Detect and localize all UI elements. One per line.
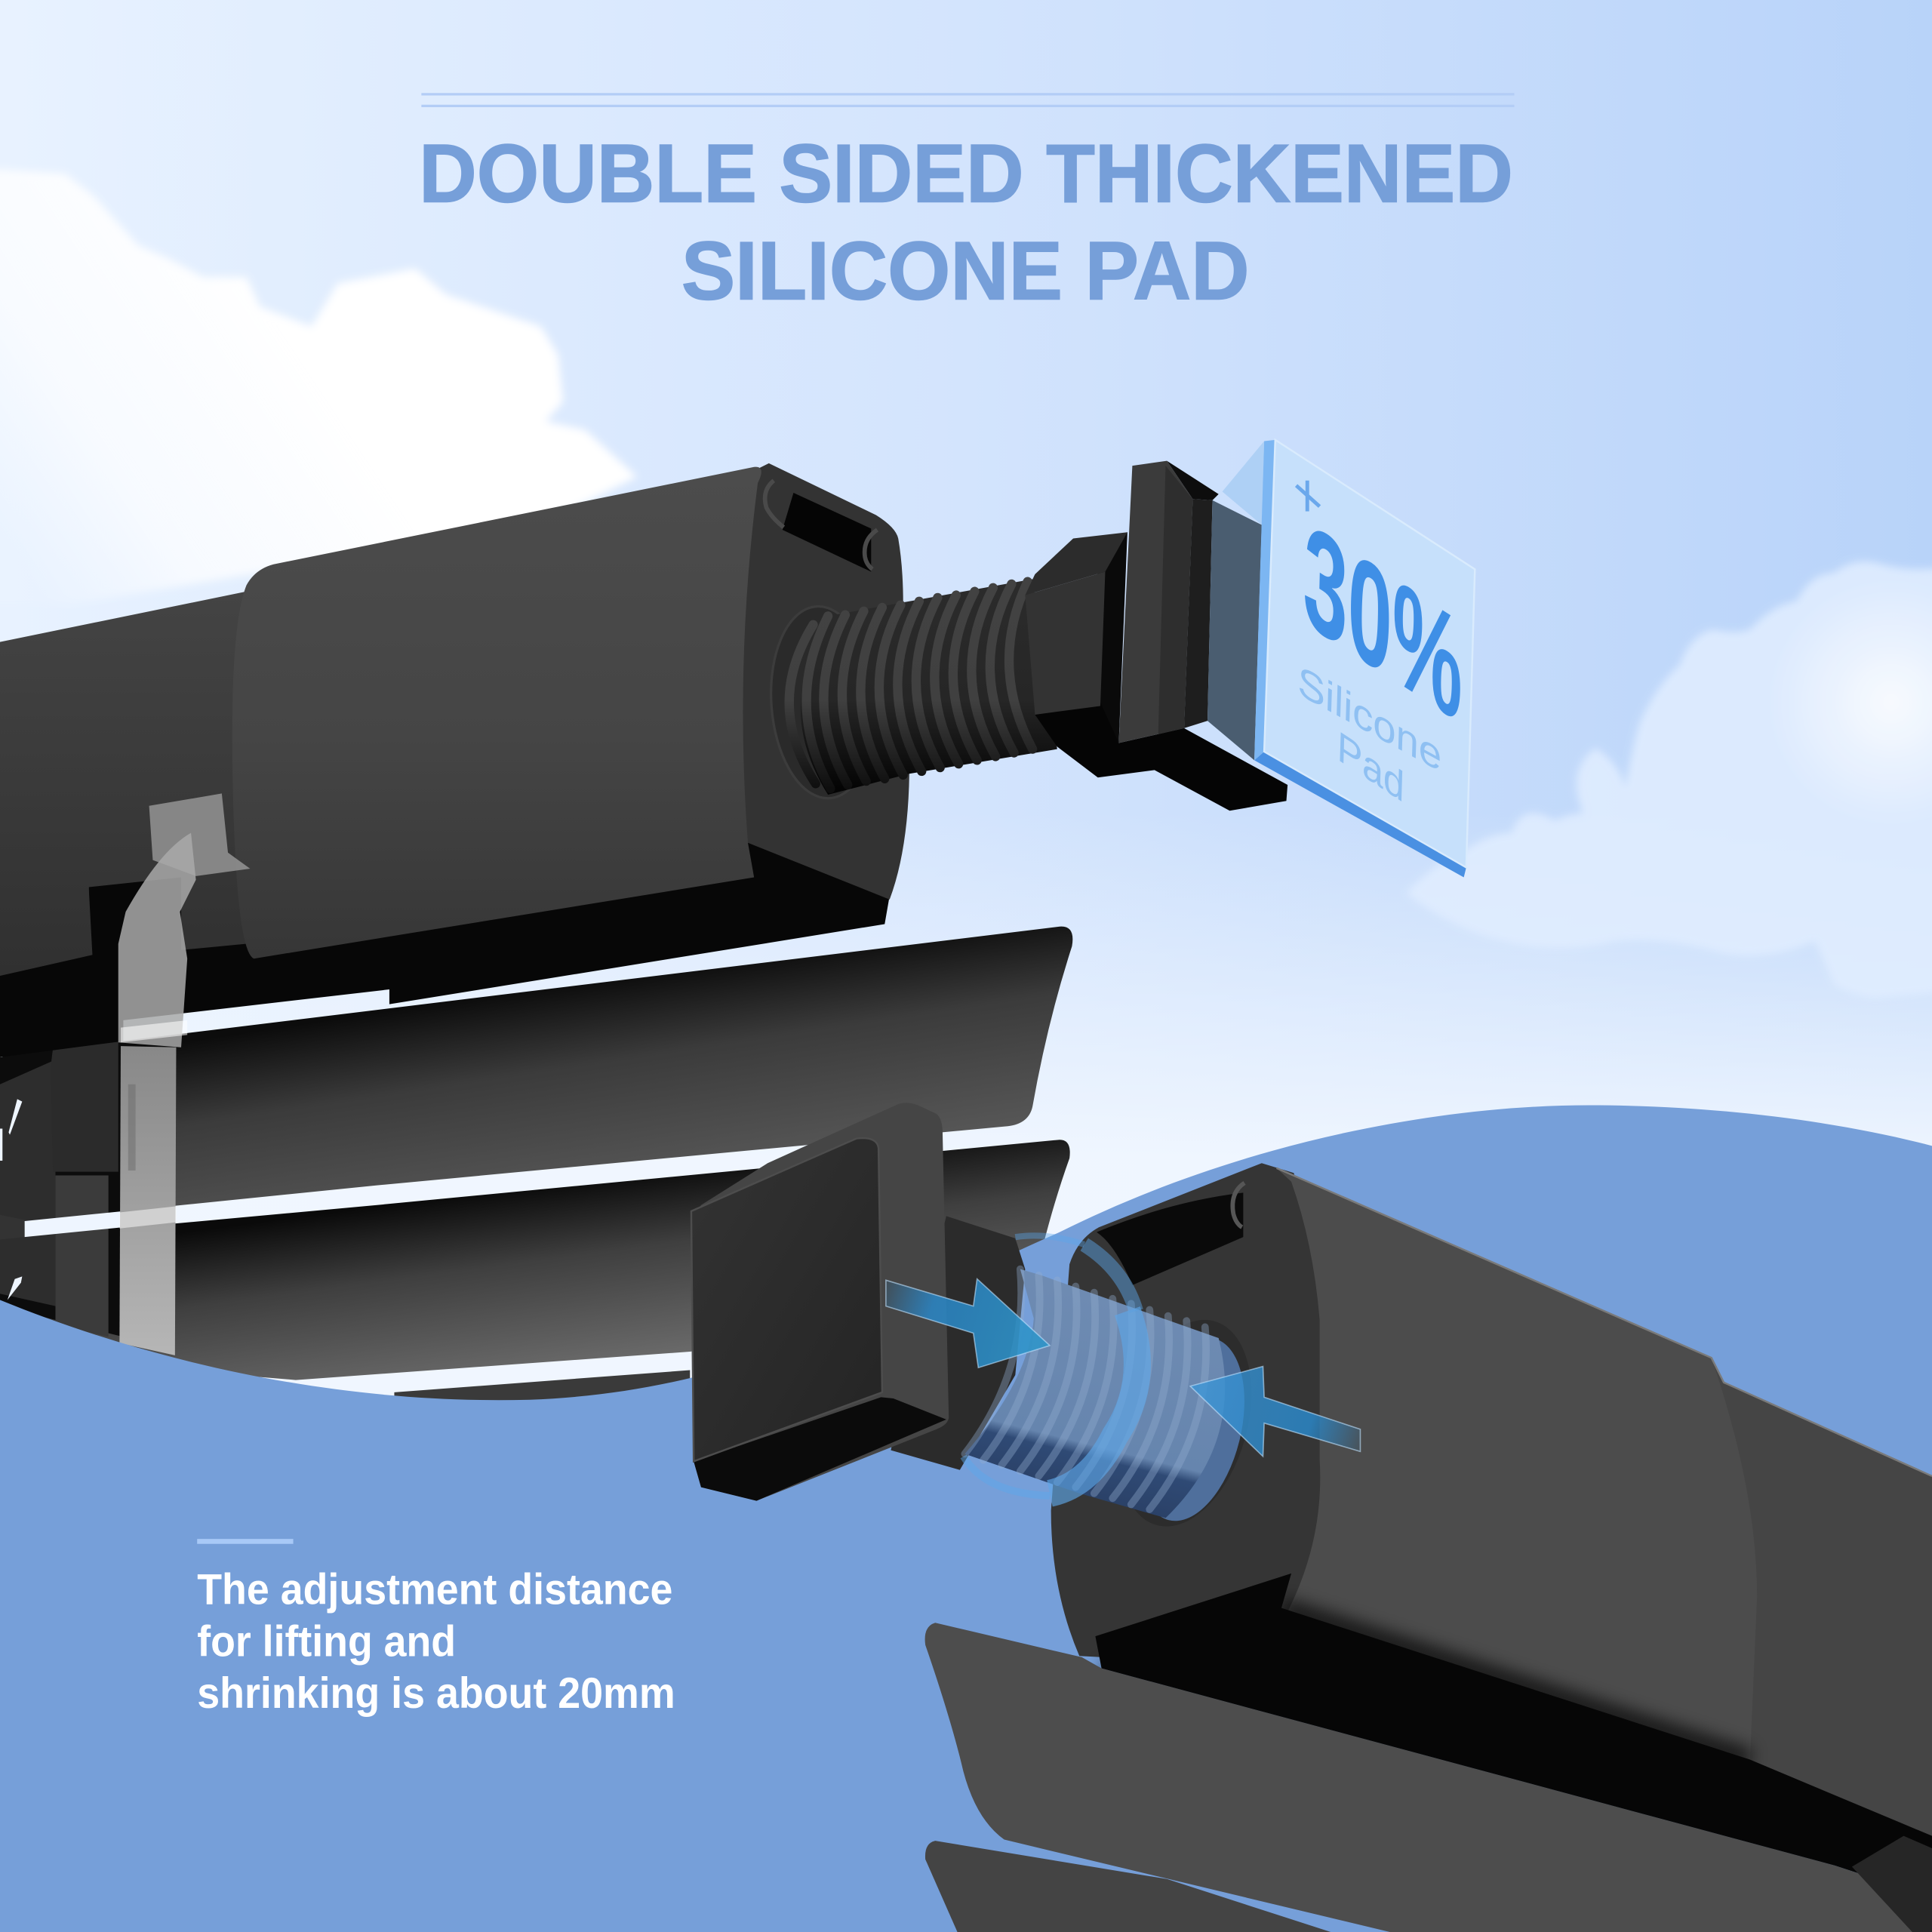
slat 3 sliver — [394, 1371, 690, 1417]
white gaps at far left — [0, 1032, 123, 1300]
upper headrail — [0, 589, 259, 976]
lower nut — [891, 1216, 1025, 1470]
lower slat 2 — [925, 1841, 1331, 1932]
caption: shrinking is about 20mm — [197, 1669, 675, 1718]
side face — [232, 467, 761, 958]
upper end cap — [232, 463, 909, 958]
lower black rail underside — [1095, 1574, 1932, 1897]
title: DOUBLE SIDED THICKENED — [419, 128, 1513, 220]
black underside to plate — [1035, 703, 1287, 811]
plate frame — [691, 1103, 949, 1501]
lower rail shadows — [1102, 1608, 1835, 1866]
upper pad plate — [1118, 461, 1219, 743]
ladder strip — [119, 1046, 176, 1355]
compression arrow right — [1190, 1367, 1360, 1457]
title — [419, 128, 1513, 318]
title: SILICONE PAD — [681, 226, 1250, 318]
lower slats — [925, 1623, 1932, 1932]
title rules — [421, 94, 1515, 106]
nut front — [1025, 572, 1105, 715]
left dark hardware behind slats — [0, 939, 123, 1337]
cloud: upper left — [0, 168, 637, 604]
30% label: 30% — [1302, 491, 1465, 755]
top edge highlight — [1276, 1168, 1932, 1476]
lower pad plate — [691, 1103, 949, 1501]
slat 2 — [0, 1140, 1070, 1380]
tape twist — [118, 833, 196, 1048]
caption: The adjustment distance — [197, 1566, 672, 1614]
rotation ring — [964, 1235, 1137, 1496]
caption: for lifting and — [197, 1617, 456, 1666]
pad bottom edge — [1254, 752, 1466, 877]
lower end cap — [1051, 1163, 1932, 1769]
plate inner shade — [1158, 466, 1192, 734]
pad translucent top — [1223, 441, 1264, 525]
silicone pad 30% — [1208, 440, 1475, 877]
upper hex nut — [1025, 532, 1287, 811]
lower headrail — [1712, 1358, 1932, 1848]
compression arrow left — [886, 1279, 1050, 1367]
lower slat 1 — [925, 1623, 1932, 1932]
end face — [733, 463, 909, 900]
caption — [197, 1566, 675, 1718]
plus sign — [1297, 481, 1320, 512]
strip highlights over gaps — [121, 1020, 187, 1042]
lower threaded bolt — [964, 1269, 1262, 1532]
pad dark side — [1208, 500, 1262, 760]
nut top facet — [1025, 532, 1128, 595]
slot hook — [1232, 1183, 1244, 1227]
clear tape and strip — [118, 793, 250, 1355]
upper threaded bolt — [789, 579, 1057, 795]
pad left edge — [1254, 440, 1275, 760]
corner hardware — [1852, 1836, 1932, 1932]
slat 1 — [0, 927, 1072, 1226]
plate front — [1118, 461, 1192, 743]
latch slot — [1097, 1192, 1243, 1285]
plate recess — [1184, 499, 1213, 728]
bolt hole — [1097, 1304, 1274, 1542]
upper black rail underside — [0, 833, 890, 1057]
latch slot — [783, 493, 871, 572]
cloud: right — [1406, 561, 1932, 998]
upper slats — [0, 927, 1072, 1417]
plate underside — [694, 1397, 946, 1501]
slot hooks — [765, 481, 877, 569]
Silicone label: Silicone — [1297, 657, 1442, 781]
neck shadow — [1097, 532, 1128, 743]
end face — [1051, 1163, 1343, 1657]
plate face — [691, 1138, 882, 1461]
plate top — [1167, 461, 1219, 500]
tape head — [149, 793, 250, 876]
bolt hole rim — [764, 603, 881, 801]
rule above caption — [197, 1539, 294, 1544]
side face — [1276, 1168, 1757, 1769]
pad face — [1264, 440, 1475, 867]
Pad label: Pad — [1337, 722, 1405, 812]
blue wave panel — [0, 1105, 1932, 1932]
